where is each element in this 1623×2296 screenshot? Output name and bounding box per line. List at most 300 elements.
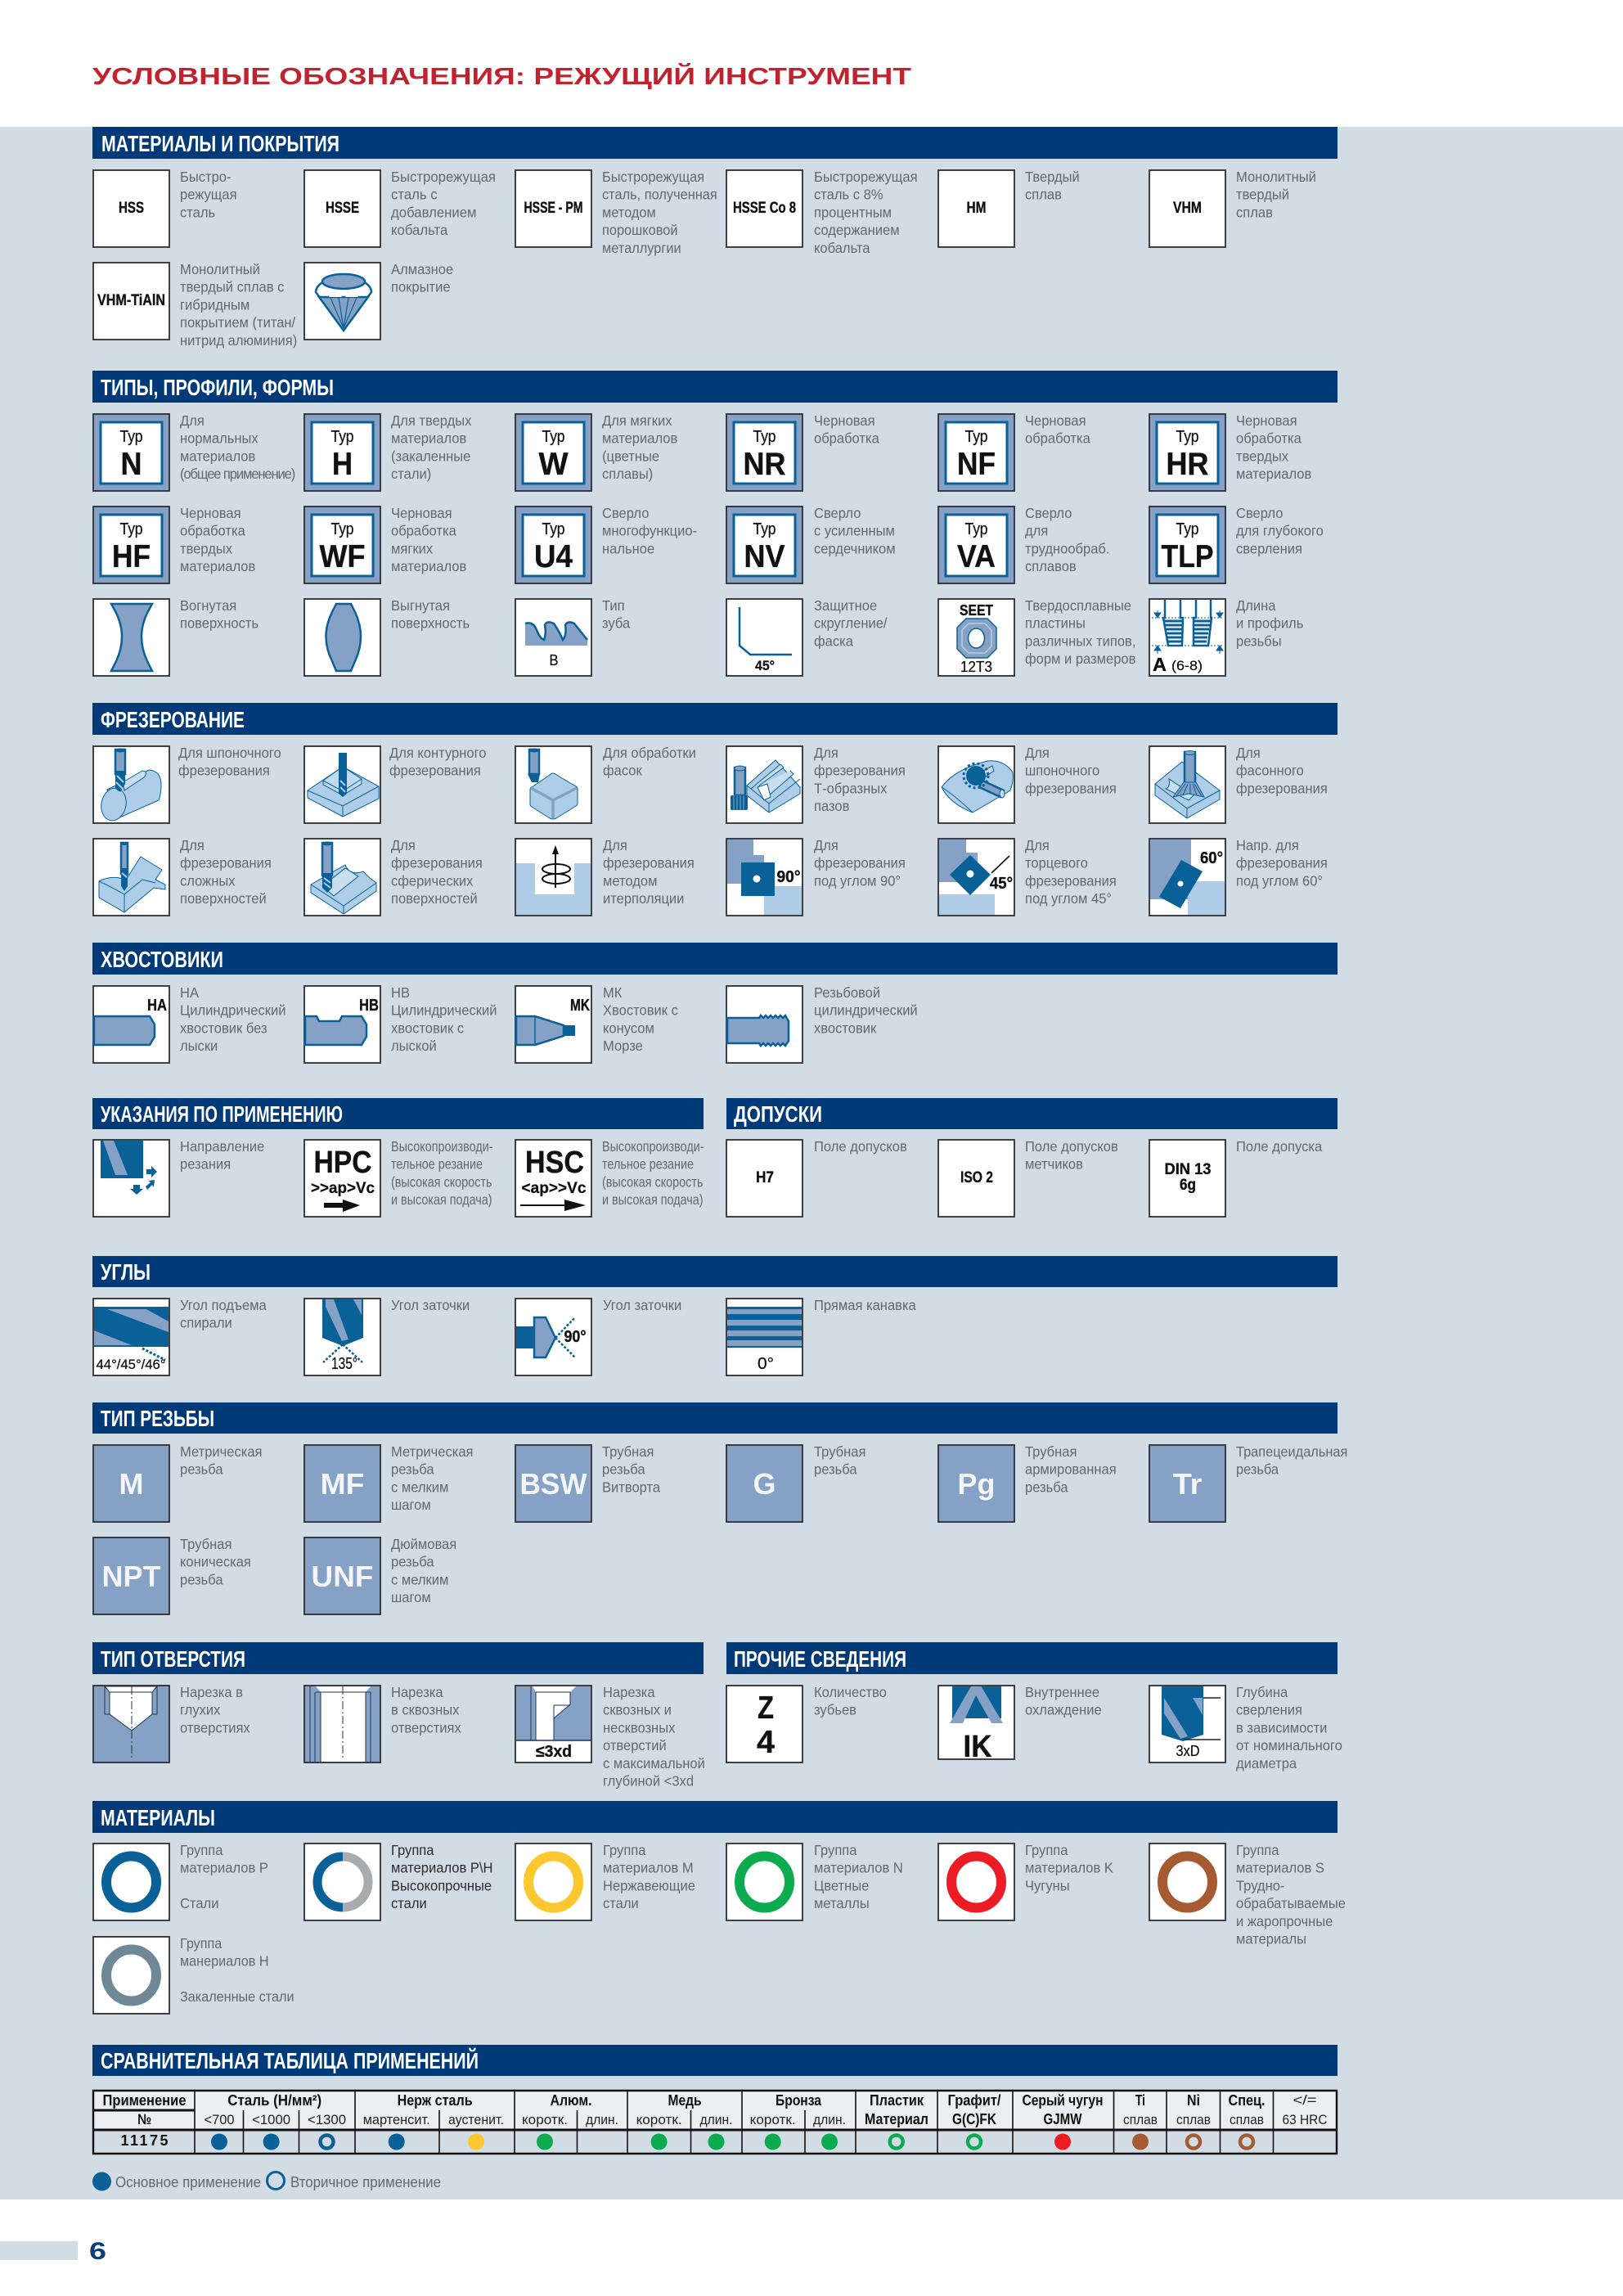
text: VHM-TiAlN: твердый сплав с: [180, 278, 285, 295]
text: Закаленные стали: [180, 1988, 294, 2005]
text: отверстий: [603, 1736, 667, 1754]
text: лыски: [180, 1037, 218, 1054]
text: inserts: различных типов,: [1025, 633, 1135, 650]
heading: materials and coatings: МАТЕРИАЛЫ И ПОКРЫТИЯ: [101, 131, 339, 156]
table: 63 HRC: [1283, 2112, 1327, 2127]
text: HSSE-PM: Быстрорежущая: [602, 168, 704, 185]
icon: HB shank: [304, 986, 380, 1063]
icon: ring N green: [726, 1844, 803, 1920]
icon: chamfer 45: [726, 599, 803, 676]
heading: angles: УГЛЫ: [101, 1259, 151, 1285]
icon: Z4: Z: [758, 1690, 774, 1726]
text: HSSE Co 8: содержанием: [814, 221, 900, 238]
icon: type NF: [938, 414, 1014, 491]
icon: 45 degree milling: 45°: [990, 875, 1013, 893]
text: пазов: [814, 797, 849, 814]
text: сложных: [180, 872, 236, 889]
text: и высокая подача): [602, 1192, 704, 1209]
text: материалов P: [180, 1859, 268, 1876]
text: inserts: пластины: [1025, 615, 1086, 632]
table: коротк.: [522, 2112, 568, 2127]
text: VHM: твердый: [1236, 186, 1289, 203]
icon: IK internal cooling: [938, 1686, 1014, 1764]
table: Применение: [103, 2092, 187, 2109]
table: №: [137, 2111, 151, 2127]
icon: type N: Тур: [119, 428, 142, 446]
icon: point angle 90: [515, 1299, 591, 1375]
icon: type TLP: TLP: [1162, 539, 1214, 574]
icon: insert SEET 12T3: SEET: [960, 602, 993, 619]
heading: milling: [92, 703, 1338, 735]
text: thread length: резьбы: [1236, 633, 1282, 650]
text: Поле допуска: [1236, 1137, 1323, 1155]
text: Для: [1236, 744, 1261, 761]
heading: material groups: МАТЕРИАЛЫ: [101, 1805, 215, 1830]
panel: tolerances: [726, 1098, 1338, 1217]
text: шпоночного: [1025, 762, 1099, 779]
text: diamond: Алмазное: [391, 260, 453, 277]
icon: type NF: NF: [957, 447, 996, 482]
text: type N: Для: [180, 412, 205, 429]
text: под углом 60°: [1236, 872, 1323, 889]
text: (высокая скорость: [602, 1174, 703, 1191]
icon: ring S brown: [1149, 1844, 1225, 1920]
icon: type U4: Тур: [542, 520, 564, 538]
text: type N: материалов: [180, 448, 255, 465]
text: type HF: твердых: [180, 540, 232, 557]
icon: point angle 90: 90°: [564, 1328, 586, 1346]
heading: shanks: [92, 943, 1338, 975]
panel: types, profiles, shapes: [92, 371, 1338, 676]
text: Нарезка в: [180, 1683, 243, 1700]
icon: type NV: NV: [744, 539, 785, 574]
table: длин.: [700, 2112, 733, 2127]
text: Стали: [180, 1894, 218, 1911]
text: type HF: обработка: [180, 522, 245, 539]
text: Угол заточки: [603, 1296, 681, 1313]
text: Для: [1025, 744, 1050, 761]
icon: ISO 2: [938, 1140, 1014, 1217]
text: фрезерования: [391, 854, 483, 871]
icon: type U4: U4: [534, 539, 573, 574]
text: спирали: [180, 1314, 232, 1331]
table: сплав: [1123, 2112, 1158, 2127]
text: (высокая скорость: [391, 1174, 492, 1191]
icon: 60 degree milling: 60°: [1200, 849, 1223, 867]
heading: hole type: ТИП ОТВЕРСТИЯ: [101, 1646, 245, 1672]
text: Прямая канавка: [814, 1296, 916, 1313]
text: резьба: [180, 1571, 223, 1588]
text: Чугуны: [1025, 1877, 1070, 1894]
icon: HSC: <ap>>Vc: [522, 1180, 587, 1197]
table: Ti: [1135, 2092, 1145, 2109]
text: материалов K: [1025, 1859, 1113, 1876]
text: резьба: [1025, 1479, 1068, 1496]
icon: type U4: [515, 506, 591, 583]
icon: thread length and profile: A: [1153, 654, 1167, 675]
table: сплав: [1230, 2112, 1264, 2127]
text: фрезерования: [814, 762, 906, 779]
text: глухих: [180, 1701, 221, 1718]
icon: H7: [726, 1140, 803, 1217]
text: type NV: сердечником: [814, 540, 896, 557]
text: type N: нормальных: [180, 430, 259, 447]
panel: angles: [92, 1256, 1338, 1375]
title: УСЛОВНЫЕ ОБОЗНАЧЕНИЯ: РЕЖУЩИЙ ИНСТРУМЕНТ: [92, 62, 911, 90]
icon: M: [93, 1445, 169, 1522]
icon: cutting direction: [93, 1140, 169, 1217]
text: стали: [391, 1894, 427, 1911]
panel: milling: [92, 703, 1338, 916]
heading: tolerances: [726, 1098, 1338, 1129]
text: Цветные: [814, 1877, 869, 1894]
text: Для: [814, 836, 838, 853]
table: Нерж сталь: [398, 2092, 473, 2109]
text: Трапецеидальная: [1236, 1443, 1347, 1460]
table: Медь: [668, 2092, 702, 2109]
icon: threaded shank: [726, 986, 803, 1063]
icon: type NF: Тур: [965, 428, 988, 446]
text: Поле допусков: [814, 1137, 907, 1155]
text: type TLP: сверления: [1236, 540, 1302, 557]
text: type VA: Сверло: [1025, 504, 1072, 521]
icon: type HF: [93, 506, 169, 583]
text: охлаждение: [1025, 1701, 1102, 1718]
text: HM: Твердый: [1025, 168, 1080, 185]
text: фрезерования: [1025, 780, 1117, 797]
icon: MF: MF: [321, 1467, 365, 1501]
text: type TLP: для глубокого: [1236, 522, 1324, 539]
text: коническая: [180, 1553, 251, 1570]
icon: Tr: [1149, 1445, 1225, 1522]
text: type H: материалов: [391, 430, 466, 447]
panel: material groups: [92, 1801, 1346, 2014]
icon: type WF: [304, 506, 380, 583]
text: цилиндрический: [814, 1002, 918, 1019]
text: фасок: [603, 762, 642, 779]
icon: VHM-TiAlN: [93, 263, 169, 340]
heading: application notes: [92, 1098, 704, 1129]
text: Трубная: [1025, 1443, 1077, 1460]
table: Бронза: [776, 2092, 822, 2109]
text: фрезерования: [180, 854, 272, 871]
text: Нарезка: [603, 1683, 655, 1700]
table: Материал: [865, 2111, 928, 2127]
text: Напр. для: [1236, 836, 1299, 853]
text: Трубная: [814, 1443, 865, 1460]
icon: type VA: [938, 506, 1014, 583]
page number: [0, 2238, 106, 2265]
text: type U4: Сверло: [602, 504, 649, 521]
text: фрезерования: [814, 854, 906, 871]
text: type W: (цветные: [602, 448, 659, 465]
text: Количество: [814, 1683, 887, 1700]
icon: through and blind hole: ≤3xd: [536, 1743, 572, 1761]
text: type NR: Черновая: [814, 412, 875, 429]
text: Цилиндрический: [391, 1002, 497, 1019]
text: сверления: [1236, 1701, 1302, 1718]
text: Трубная: [602, 1443, 654, 1460]
icon: 90 degree milling: 90°: [777, 868, 800, 886]
icon: Z4: 4: [757, 1725, 775, 1760]
heading: comparison table: [92, 2045, 1338, 2076]
text: резьба: [602, 1461, 645, 1478]
text: Нержавеющие: [603, 1877, 695, 1894]
text: отверстиях: [391, 1719, 461, 1736]
text: с мелким: [391, 1571, 448, 1588]
text: Группа: [814, 1841, 857, 1858]
icon: convex surface: [304, 599, 380, 676]
text: фрезерования: [1236, 854, 1328, 871]
table: <700: [205, 2112, 234, 2127]
icon: HPC: HPC: [314, 1146, 371, 1180]
text: манериалов H: [180, 1953, 269, 1970]
icon: ring P/H blue and gray: [304, 1844, 380, 1920]
icon: HPC: [304, 1140, 380, 1217]
text: НВ: [391, 984, 410, 1001]
icon: type WF: Тур: [330, 520, 353, 538]
icon: diamond: [304, 263, 380, 340]
text: резания: [180, 1155, 231, 1173]
table: GJMW: [1044, 2111, 1082, 2127]
legend: [92, 2172, 441, 2191]
icon: type H: [304, 414, 380, 491]
icon: type WF: WF: [319, 539, 365, 574]
text: обрабатываемые: [1236, 1894, 1346, 1911]
table: длин.: [586, 2112, 618, 2127]
icon: M: M: [119, 1467, 144, 1501]
heading: thread type: [92, 1402, 1338, 1434]
text: несквозных: [603, 1719, 676, 1736]
text: от номинального: [1236, 1736, 1342, 1754]
text: VHM-TiAlN: Монолитный: [180, 260, 260, 277]
text: HM: сплав: [1025, 186, 1062, 203]
text: Группа: [180, 1935, 223, 1952]
text: фрезерования: [1236, 780, 1328, 797]
heading: materials and coatings: [92, 127, 1338, 159]
icon: type H: Тур: [330, 428, 353, 446]
panel: hole type: [92, 1642, 705, 1790]
table: коротк.: [636, 2112, 682, 2127]
text: diamond: покрытие: [391, 278, 451, 295]
table: Ni: [1187, 2092, 1200, 2109]
icon: HSSE Co 8: [726, 170, 803, 247]
icon: tooth type: [515, 599, 591, 676]
table: Сталь (Н/мм²): [227, 2092, 321, 2109]
icon: type HF: HF: [112, 539, 151, 574]
text: chamfer: фаска: [814, 633, 853, 650]
text: type W: сплавы): [602, 465, 653, 482]
text: в сквозных: [391, 1701, 460, 1718]
text: type VA: труднообраб.: [1025, 540, 1109, 557]
table: Алюм.: [550, 2092, 592, 2109]
text: Угол подъема: [180, 1296, 267, 1313]
text: HSS: режущая: [180, 186, 237, 203]
icon: BSW: BSW: [520, 1467, 587, 1501]
icon: IK internal cooling: IK: [964, 1730, 992, 1764]
icon: DIN 13 6g: [1149, 1140, 1225, 1217]
text: материалы: [1236, 1930, 1306, 1947]
text: метчиков: [1025, 1155, 1083, 1173]
text: HSSE Co 8: кобальта: [814, 239, 870, 256]
text: HSSE Co 8: Быстрорежущая: [814, 168, 918, 185]
icon: type VA: VA: [957, 539, 996, 574]
icon: straight flute: [726, 1299, 803, 1375]
icon: point angle 135: [304, 1299, 380, 1375]
text: резьба: [391, 1461, 434, 1478]
icon: ring K red: [938, 1844, 1014, 1920]
icon: point angle 135: 135°: [331, 1355, 357, 1373]
text: диаметра: [1236, 1754, 1297, 1772]
icon: G: G: [753, 1467, 776, 1501]
text: type NR: обработка: [814, 430, 879, 447]
heading: thread type: ТИП РЕЗЬБЫ: [101, 1406, 214, 1431]
text: с максимальной: [603, 1754, 705, 1772]
text: HSSE: добавлением: [391, 204, 477, 221]
icon: insert SEET 12T3: 12T3: [960, 659, 992, 675]
text: и жаропрочные: [1236, 1912, 1333, 1929]
text: хвостовик с: [391, 1020, 464, 1037]
table: Серый чугун: [1023, 2092, 1103, 2109]
text: type W: материалов: [602, 430, 677, 447]
icon: HSSE Co 8: HSSE Co 8: [733, 200, 796, 217]
icon: H7: H7: [756, 1169, 774, 1186]
text: хвостовик без: [180, 1020, 268, 1037]
text: фрезерования: [178, 762, 270, 779]
text: Нарезка: [391, 1683, 443, 1700]
text: convex: Выгнутая: [391, 597, 450, 614]
table: длин.: [813, 2112, 846, 2127]
text: глубиной <3xd: [603, 1772, 694, 1790]
text: поверхностей: [180, 889, 267, 907]
text: type HR: Черновая: [1236, 412, 1297, 429]
text: тельное резание: [391, 1156, 483, 1173]
icon: helix angle: 44°/45°/46°: [97, 1357, 165, 1372]
icon: DIN 13 6g: DIN 13: [1165, 1161, 1211, 1178]
heading: hole type: [92, 1642, 704, 1674]
text: type HR: твердых: [1236, 448, 1288, 465]
text: материалов S: [1236, 1859, 1324, 1876]
icon: HA shank: HA: [147, 997, 167, 1015]
icon: Pg: [938, 1445, 1014, 1522]
table: 11175: [121, 2132, 169, 2149]
table: G(C)FK: [952, 2111, 996, 2127]
text: под углом 90°: [814, 872, 901, 889]
icon: type HR: HR: [1167, 447, 1209, 482]
text: Группа: [603, 1841, 646, 1858]
icon: Z4: [726, 1686, 803, 1763]
text: Для: [1025, 836, 1050, 853]
text: type NV: с усиленным: [814, 522, 895, 539]
text: Метрическая: [391, 1443, 474, 1460]
icon: Tr: Tr: [1173, 1467, 1203, 1501]
text: HSS: сталь: [180, 204, 215, 221]
text: type WF: обработка: [391, 522, 456, 539]
text: Поле допусков: [1025, 1137, 1118, 1155]
text: type HR: обработка: [1236, 430, 1302, 447]
table: [93, 2091, 1337, 2154]
text: HSSE-PM: методом: [602, 204, 656, 221]
text: Для контурного: [389, 744, 486, 761]
icon: HSS: HSS: [119, 200, 144, 217]
table: Графит/: [947, 2092, 1001, 2109]
text: в зависимости: [1236, 1719, 1327, 1736]
text: НА: [180, 984, 199, 1001]
text: VHM: сплав: [1236, 204, 1273, 221]
icon: HSSE: HSSE: [326, 200, 359, 217]
text: type NV: Сверло: [814, 504, 861, 521]
text: HSSE-PM: сталь, полученная: [602, 186, 717, 203]
icon: T-slot milling: [726, 746, 803, 823]
panel: thread type: [92, 1402, 1347, 1614]
text: Для: [603, 836, 627, 853]
icon: 45 degree milling: [938, 839, 1014, 916]
text: type HF: Черновая: [180, 504, 241, 521]
text: методом: [603, 872, 658, 889]
text: Для шпоночного: [178, 744, 281, 761]
icon: HSSE: [304, 170, 380, 247]
page number: 6: [89, 2238, 106, 2265]
text: type W: Для мягких: [602, 412, 672, 429]
text: Трубная: [180, 1535, 232, 1552]
text: type VA: сплавов: [1025, 557, 1077, 574]
icon: BSW: [515, 1445, 591, 1522]
table: <1300: [308, 2112, 346, 2127]
icon: insert SEET 12T3: [938, 599, 1014, 676]
text: Витворта: [602, 1479, 660, 1496]
text: поверхностей: [391, 889, 478, 907]
text: VHM-TiAlN: гибридным: [180, 296, 250, 313]
text: резьба: [814, 1461, 857, 1478]
text: type HR: материалов: [1236, 465, 1311, 482]
text: Т-образных: [814, 780, 888, 797]
panel: application comparison table: [92, 2045, 1338, 2191]
text: Внутреннее: [1025, 1683, 1099, 1700]
text: Для обработки: [603, 744, 696, 761]
icon: type NR: [726, 414, 803, 491]
text: Цилиндрический: [180, 1002, 285, 1019]
icon: VHM: [1149, 170, 1225, 247]
icon: HM: [938, 170, 1014, 247]
icon: MF: [304, 1445, 380, 1522]
text: tooth type: Тип: [602, 597, 625, 614]
heading: types: [92, 371, 1338, 403]
icon: type HR: Тур: [1176, 428, 1199, 446]
text: HSS: Быстро-: [180, 168, 232, 185]
text: фрезерования: [603, 854, 695, 871]
text: thread length: и профиль: [1236, 615, 1303, 632]
icon: 60 degree milling: [1149, 839, 1225, 916]
heading: types: ТИПЫ, ПРОФИЛИ, ФОРМЫ: [101, 375, 334, 400]
text: concave: Вогнутая: [180, 597, 236, 614]
text: type NF: обработка: [1025, 430, 1090, 447]
text: МК: [603, 984, 622, 1001]
icon: type N: N: [121, 447, 142, 482]
icon: thread length and profile: (6-8): [1171, 658, 1203, 673]
text: фрезерования: [1025, 872, 1117, 889]
table: Пластик: [870, 2092, 924, 2109]
icon: helix angle: [93, 1299, 169, 1375]
icon: chamfer milling: [515, 746, 591, 823]
icon: type NV: Тур: [753, 520, 776, 538]
text: резьба: [391, 1553, 434, 1570]
text: HSSE: кобальта: [391, 222, 448, 238]
icon: chamfer 45: 45°: [755, 658, 775, 673]
text: type NF: Черновая: [1025, 412, 1086, 429]
text: HSSE: сталь с: [391, 186, 438, 203]
text: type VA: для: [1025, 522, 1048, 539]
icon: VHM: VHM: [1173, 200, 1202, 217]
